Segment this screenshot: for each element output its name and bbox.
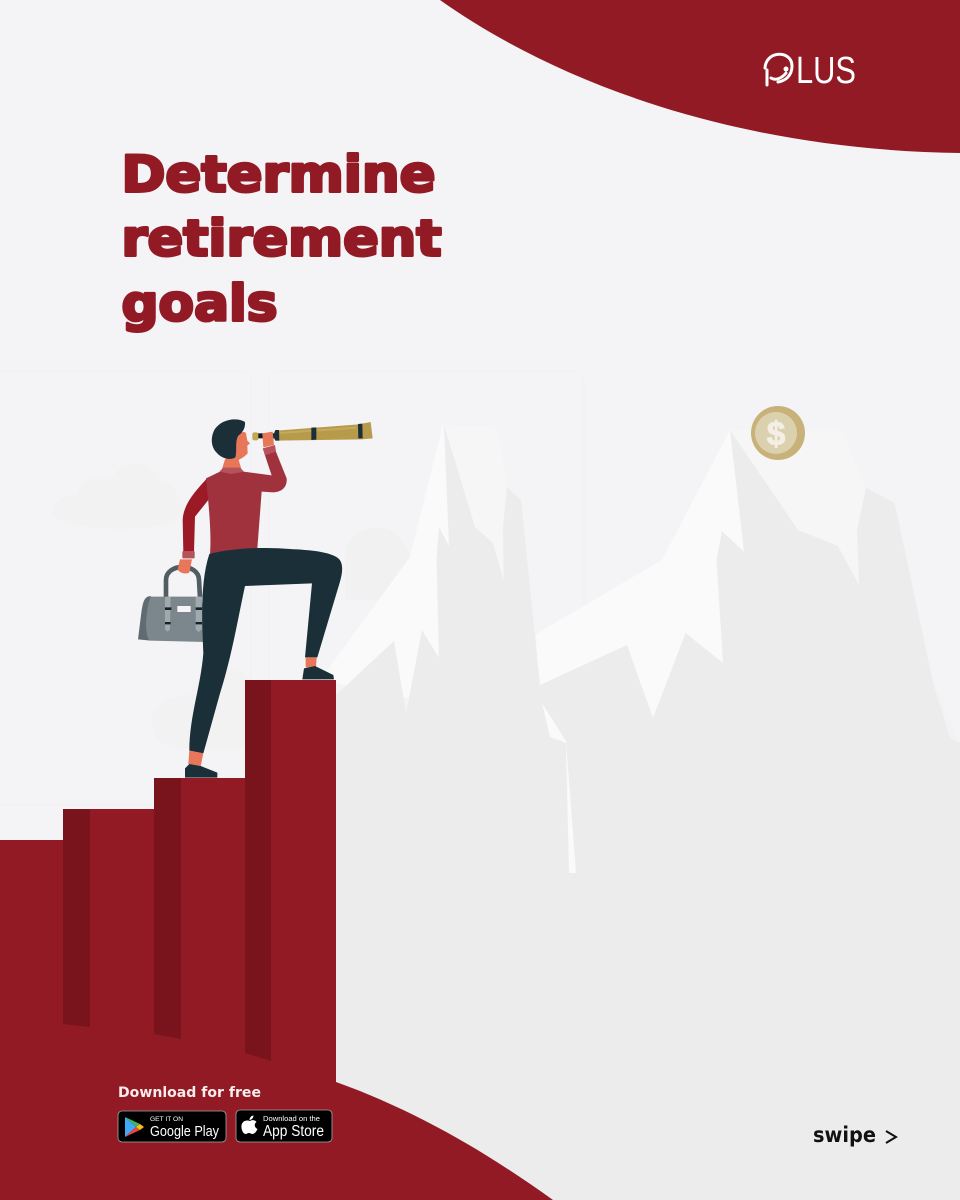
hair: [212, 419, 245, 459]
download section: [118, 1085, 332, 1142]
swipe prompt: swipe: [813, 1123, 876, 1147]
snow sliver: [542, 703, 576, 873]
badge: Google Play: Google Play: [150, 1123, 219, 1140]
wordmark: LUS: [796, 50, 856, 92]
icon: play triangle: [125, 1117, 144, 1137]
shoes: [185, 666, 334, 778]
icon: stylised P with leaf: [765, 54, 792, 85]
icon: apple: [241, 1116, 258, 1134]
badge: Google Play: GET IT ON: [150, 1116, 183, 1123]
badge: Google Play: [118, 1111, 226, 1142]
handbag handle: [166, 567, 200, 597]
trousers: [189, 548, 342, 753]
download heading: Download for free: [118, 1085, 261, 1101]
badge: App Store: Download on the: [263, 1116, 320, 1123]
icon: gold dollar coin: $: [767, 415, 785, 452]
mountains: [320, 424, 960, 1200]
background: faint panels and clouds: [0, 371, 584, 805]
torso and raised arm: [206, 449, 287, 554]
ankles: [188, 657, 317, 766]
icon: gold dollar coin: [751, 406, 805, 460]
title: goals: [122, 274, 278, 332]
title: [122, 146, 442, 332]
red stepped columns: [0, 680, 553, 1200]
handbag body: [138, 596, 205, 642]
badge: App Store: App Store: [263, 1123, 324, 1140]
raised cuff: [263, 445, 276, 455]
raised hand: [262, 432, 274, 447]
lowered hand and cuff: [178, 559, 192, 573]
person with telescope and handbag: [138, 419, 373, 778]
mountain body: [336, 425, 960, 1200]
title: retirement: [122, 210, 442, 268]
left sleeve: [183, 479, 208, 552]
logo: PLUS: [765, 50, 856, 92]
badge: App Store: [236, 1110, 332, 1142]
arrow: [886, 1131, 896, 1143]
top red curved banner: [440, 0, 960, 153]
title: Determine: [122, 146, 436, 204]
icon: telescope: [252, 422, 373, 441]
column shadows: [63, 809, 90, 1027]
mountain snow caps: [320, 424, 460, 700]
collar: [219, 468, 244, 474]
neck and face: [222, 432, 250, 470]
